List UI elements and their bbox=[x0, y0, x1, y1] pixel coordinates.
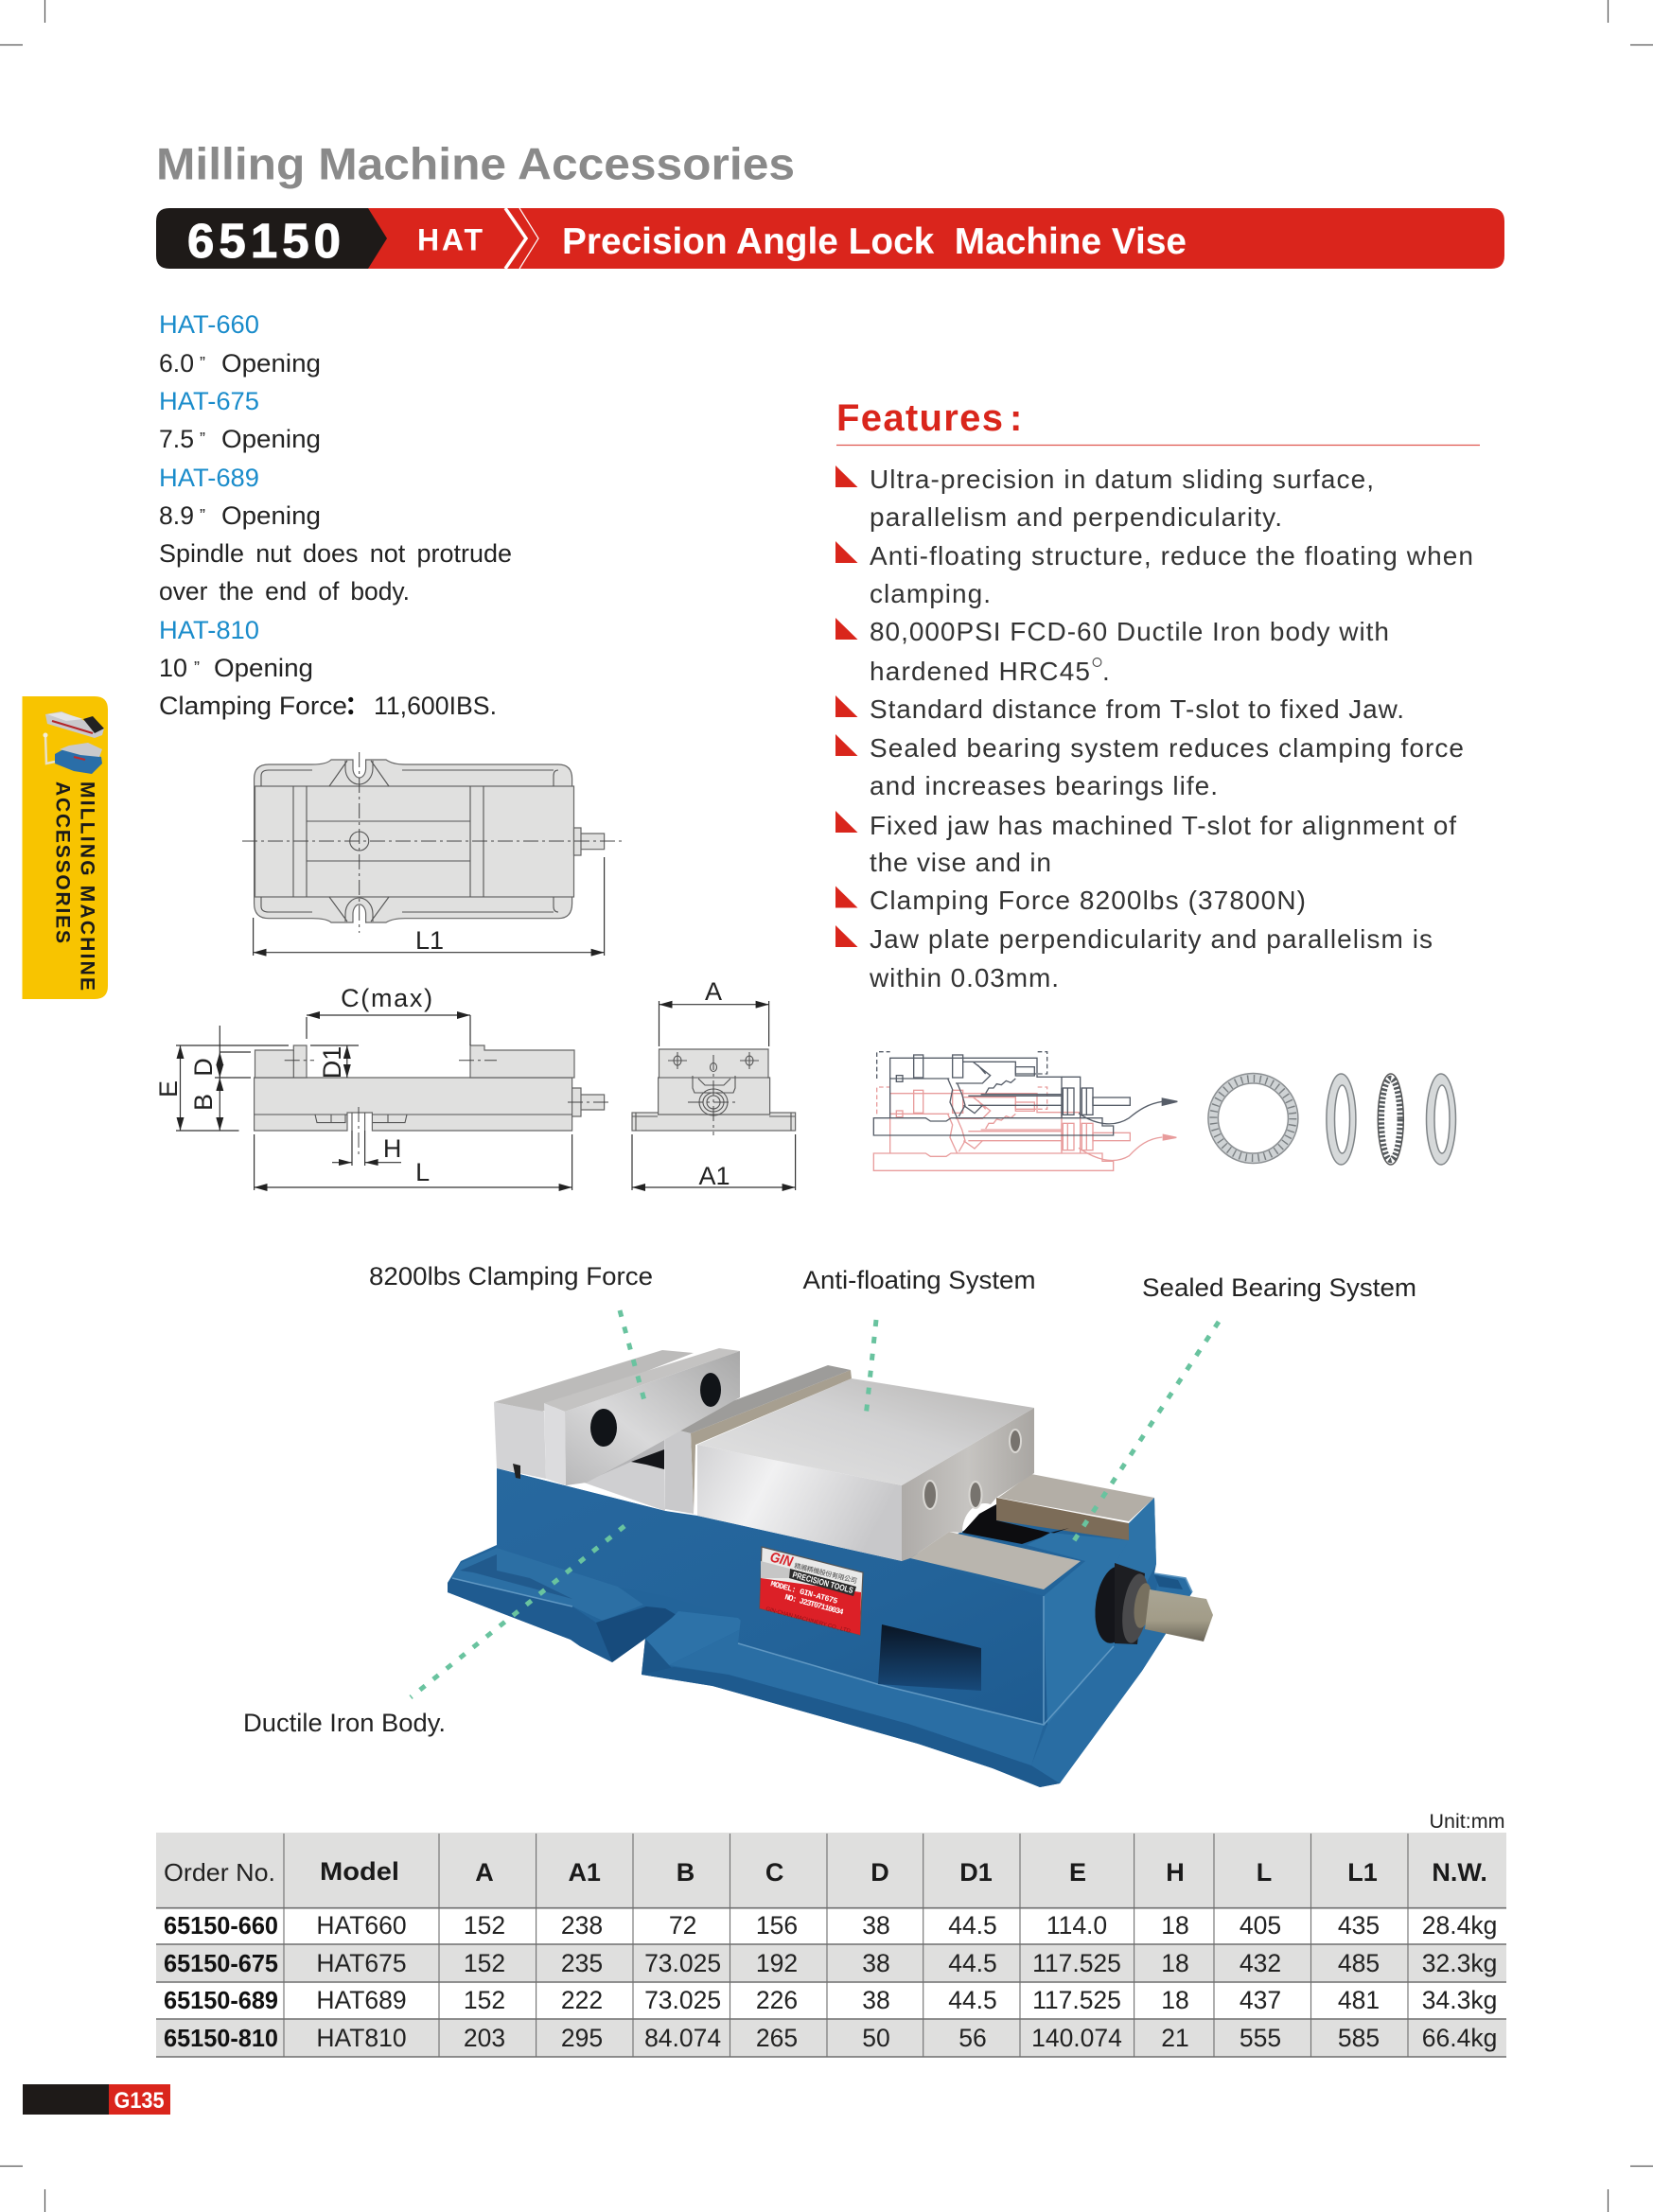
top view spindle bbox=[573, 828, 605, 855]
table row 65150-810: 65150-810 bbox=[164, 2024, 278, 2052]
opening 8.9: Opening bbox=[221, 501, 321, 530]
nameplate precision tools: PRECISION TOOLS bbox=[791, 1570, 854, 1595]
table row 65150-689: 38 bbox=[862, 1986, 890, 2014]
table row 65150-675: HAT675 bbox=[316, 1949, 407, 1977]
table row 65150-689: HAT689 bbox=[316, 1986, 407, 2014]
nameplate chinese name: 精展精機股份有限公司 bbox=[794, 1561, 858, 1585]
page tag black block bbox=[23, 2084, 109, 2115]
vise base silhouette bbox=[448, 1468, 1192, 1787]
callout: sealed bearing bbox=[1073, 1273, 1416, 1542]
callout: anti-floating bbox=[802, 1266, 1035, 1417]
table row 65150-810: 84.074 bbox=[644, 2024, 721, 2052]
model list bbox=[159, 310, 512, 722]
clamping force: ： bbox=[344, 685, 370, 722]
bearing washer right bbox=[1427, 1074, 1455, 1165]
opening 8.9 bbox=[159, 501, 321, 530]
vise right flange top bbox=[1031, 1575, 1192, 1783]
end view base bbox=[632, 1113, 796, 1131]
opening 6.0: 6.0 bbox=[159, 349, 194, 377]
vise jaw bolts bbox=[590, 1373, 721, 1447]
nameplate serial: NO: J23T07110034 bbox=[783, 1592, 845, 1617]
icon: steel vise bbox=[45, 711, 104, 738]
end view drawing bbox=[632, 977, 796, 1190]
table row 65150-689: 44.5 bbox=[948, 1986, 997, 2014]
banner black code block bbox=[156, 208, 387, 269]
vise moving plate top bbox=[664, 1365, 851, 1433]
table row 65150-675: 38 bbox=[862, 1949, 890, 1977]
opening 10: Opening bbox=[214, 654, 313, 682]
table row 65150-660 bbox=[164, 1911, 1497, 1940]
table header: C bbox=[765, 1858, 783, 1887]
side view details bbox=[255, 1050, 572, 1131]
table row 65150-810: 295 bbox=[561, 2024, 603, 2052]
callout: clamping force bbox=[369, 1262, 653, 1404]
dimension label C(max): C(max) bbox=[341, 984, 432, 1012]
dimension label E: E bbox=[154, 1080, 183, 1097]
table row 65150-689: 222 bbox=[561, 1986, 603, 2014]
table row 65150-675: 65150-675 bbox=[164, 1949, 278, 1977]
gray raised position bbox=[873, 1052, 1177, 1135]
vise floor bbox=[584, 1462, 665, 1511]
table row 65150-675 bbox=[164, 1949, 1497, 1977]
table row 65150-810: HAT810 bbox=[316, 2024, 407, 2052]
callout: ductile iron bbox=[243, 1526, 624, 1737]
table row 65150-675: 44.5 bbox=[948, 1949, 997, 1977]
table row 65150-660: 28.4kg bbox=[1422, 1911, 1497, 1940]
table row 65150-810: 555 bbox=[1240, 2024, 1281, 2052]
model HAT-689: HAT-689 bbox=[159, 464, 259, 492]
end view details bbox=[632, 1052, 795, 1131]
mechanism cross-section diagram bbox=[873, 1052, 1177, 1170]
dimension lines bbox=[176, 1015, 572, 1190]
model HAT-810: HAT-810 bbox=[159, 616, 259, 644]
table row 65150-689: 226 bbox=[756, 1986, 798, 2014]
table header: B bbox=[677, 1858, 695, 1887]
page tag red block bbox=[109, 2084, 170, 2115]
vise moving plate front bbox=[664, 1427, 694, 1514]
sidebar yellow background bbox=[23, 696, 108, 999]
table row 65150-689: 73.025 bbox=[644, 1986, 721, 2014]
table row 65150-810: 50 bbox=[862, 2024, 890, 2052]
red lowered position bbox=[873, 1087, 1176, 1170]
table row 65150-675: 18 bbox=[1161, 1949, 1189, 1977]
dimension A1 bbox=[632, 1134, 796, 1190]
nameplate grey band bbox=[761, 1561, 790, 1578]
nameplate red panel bbox=[760, 1578, 861, 1635]
table row 65150-810 bbox=[164, 2024, 1497, 2052]
vise left flange recess bbox=[460, 1554, 572, 1599]
dimension L1: L1 bbox=[415, 926, 444, 955]
table backgrounds bbox=[156, 1833, 1506, 2057]
dimension A bbox=[659, 977, 769, 1046]
table header: H bbox=[1166, 1858, 1185, 1887]
table row 65150-810: 585 bbox=[1338, 2024, 1380, 2052]
table row 65150-689: 481 bbox=[1338, 1986, 1380, 2014]
table row 65150-810: 56 bbox=[958, 2024, 987, 2052]
opening 10 bbox=[159, 654, 313, 682]
vise spindle hex bbox=[1145, 1589, 1213, 1641]
nameplate brand: GIN bbox=[768, 1549, 795, 1571]
table header: A bbox=[475, 1858, 494, 1887]
page tag bbox=[23, 2084, 170, 2115]
vise fixed jaw front bbox=[494, 1402, 546, 1479]
feature list text: hardened HRC45 bbox=[870, 657, 1090, 686]
features panel bbox=[835, 397, 1480, 992]
end view body bbox=[659, 1049, 770, 1115]
feature list text: Ultra-precision in datum sliding surface, bbox=[870, 465, 1374, 494]
dimension label B: B bbox=[189, 1094, 218, 1111]
vise fixed plate face bbox=[565, 1351, 740, 1485]
banner chevrons bbox=[505, 208, 538, 269]
table row 65150-660: 72 bbox=[669, 1911, 696, 1940]
feature list text: Fixed jaw has machined T-slot for alignment of bbox=[870, 811, 1456, 840]
vise body front face bbox=[497, 1468, 1047, 1725]
icon: blue vise bbox=[44, 732, 102, 774]
top view drawing bbox=[242, 752, 625, 956]
vise body right face bbox=[1044, 1498, 1156, 1725]
vise plate strip bbox=[691, 1370, 852, 1514]
feature list text: Standard distance from T-slot to fixed Jaw. bbox=[870, 694, 1404, 724]
table row 65150-689: 34.3kg bbox=[1422, 1986, 1497, 2014]
feature list text: within 0.03mm. bbox=[869, 963, 1059, 992]
opening 6.0 bbox=[159, 349, 321, 377]
table row 65150-660: 435 bbox=[1338, 1911, 1380, 1940]
nameplate model: MODEL: GIN-AT675 bbox=[769, 1579, 838, 1606]
dimension label L: L bbox=[415, 1158, 430, 1186]
vise spindle collar bbox=[1090, 1563, 1154, 1645]
vise dark opening bbox=[962, 1504, 1069, 1544]
vise front pad bbox=[645, 1611, 743, 1665]
table row 65150-660: 152 bbox=[464, 1911, 505, 1940]
bearing needle cage bbox=[1208, 1073, 1298, 1164]
vise casting highlights bbox=[452, 1573, 1192, 1725]
table row 65150-660: 65150-660 bbox=[164, 1911, 278, 1940]
opening 6.0: ” bbox=[200, 354, 205, 373]
features heading: Features bbox=[836, 397, 1003, 439]
table row 65150-810: 66.4kg bbox=[1422, 2024, 1497, 2052]
feature list text: Jaw plate perpendicularity and parallelism is bbox=[870, 924, 1433, 954]
table header: Model bbox=[320, 1857, 399, 1886]
table row 65150-675: 32.3kg bbox=[1422, 1949, 1497, 1977]
model HAT-675: HAT-675 bbox=[159, 387, 259, 415]
top view details bbox=[261, 761, 558, 922]
feature list text bbox=[869, 465, 1473, 992]
opening 8.9: 8.9 bbox=[159, 501, 194, 530]
opening 8.9: ” bbox=[200, 506, 205, 525]
nameplate dark band bbox=[789, 1569, 856, 1596]
sidebar label line 1: MILLING MACHINE bbox=[76, 781, 98, 991]
dimension A1: A1 bbox=[698, 1162, 730, 1190]
table row 65150-689: 65150-689 bbox=[164, 1986, 278, 2014]
table row 65150-689: 117.525 bbox=[1032, 1986, 1121, 2014]
opening 6.0: Opening bbox=[221, 349, 321, 377]
feature list text: clamping. bbox=[870, 579, 991, 608]
vise dark gap bbox=[631, 1449, 664, 1469]
feature bullets bbox=[835, 465, 857, 947]
vise left flange edge bbox=[448, 1578, 612, 1662]
feature list text: the vise and in bbox=[870, 848, 1051, 877]
table row 65150-810: 21 bbox=[1161, 2024, 1189, 2052]
bearing washer left bbox=[1327, 1074, 1356, 1165]
callout: ductile iron: Ductile Iron Body. bbox=[243, 1709, 446, 1737]
vise flange slot bbox=[1154, 1575, 1183, 1589]
table row 65150-810: 203 bbox=[464, 2024, 505, 2052]
feature list text: and increases bearings life. bbox=[870, 771, 1218, 800]
vise fixed jaw top bbox=[494, 1350, 694, 1412]
nameplate bbox=[760, 1547, 863, 1635]
page number: G135 bbox=[114, 2088, 165, 2114]
opening 10: 10 bbox=[159, 654, 187, 682]
top view body bbox=[255, 760, 572, 922]
table row 65150-675: 485 bbox=[1338, 1949, 1380, 1977]
feature list text: Clamping Force 8200lbs (37800N) bbox=[870, 886, 1306, 915]
dimension label D1: D1 bbox=[318, 1046, 346, 1079]
vise pad front face bbox=[642, 1639, 674, 1675]
vise rail bbox=[996, 1498, 1129, 1540]
vise left flange top bbox=[451, 1548, 643, 1621]
side view drawing bbox=[154, 984, 612, 1190]
table header: Order No. bbox=[164, 1858, 275, 1887]
feature list text: . bbox=[1102, 657, 1110, 686]
table row 65150-689: 152 bbox=[464, 1986, 505, 2014]
feature list text: 80,000PSI FCD-60 Ductile Iron body with bbox=[870, 617, 1389, 646]
table header bbox=[164, 1857, 1487, 1887]
spindle note line 1: Spindle nut does not protrude bbox=[159, 539, 512, 568]
table row 65150-675: 192 bbox=[756, 1949, 798, 1977]
vise photo bbox=[448, 1348, 1213, 1787]
vise T-slot notch bbox=[513, 1464, 520, 1479]
vise front rim bbox=[669, 1629, 1044, 1765]
vise rear steel ledge bbox=[998, 1474, 1154, 1521]
title: Milling Machine Accessories bbox=[156, 138, 795, 189]
bearing needle ring bbox=[1378, 1074, 1403, 1165]
callout: clamping force: 8200lbs Clamping Force bbox=[369, 1262, 653, 1290]
table row 65150-660: 238 bbox=[561, 1911, 603, 1940]
banner red bar bbox=[170, 208, 1504, 269]
callout: sealed bearing: Sealed Bearing System bbox=[1142, 1273, 1416, 1302]
table header: A1 bbox=[568, 1858, 601, 1887]
table header: L1 bbox=[1347, 1858, 1378, 1887]
table row 65150-660: HAT660 bbox=[316, 1911, 407, 1940]
model HAT-660: HAT-660 bbox=[159, 310, 259, 339]
vise nut area bbox=[1027, 1533, 1129, 1561]
vise floor backing bbox=[587, 1440, 664, 1483]
vise moving jaw front face bbox=[697, 1445, 902, 1561]
table row 65150-810: 140.074 bbox=[1031, 2024, 1122, 2052]
table row 65150-660: 44.5 bbox=[948, 1911, 997, 1940]
callout: anti-floating: Anti-floating System bbox=[802, 1266, 1035, 1294]
table row 65150-689: 18 bbox=[1161, 1986, 1189, 2014]
side view base bbox=[255, 1078, 572, 1131]
features heading: : bbox=[1010, 397, 1022, 439]
vise moving jaw top bbox=[697, 1378, 1034, 1485]
table row 65150-689 bbox=[164, 1986, 1497, 2014]
top view slide bbox=[255, 786, 573, 897]
dimension label H: H bbox=[383, 1134, 401, 1163]
spindle note line 2: over the end of body. bbox=[159, 577, 410, 606]
feature list text: parallelism and perpendicularity. bbox=[870, 502, 1282, 532]
end view centre lines bbox=[688, 1055, 739, 1135]
features rule bbox=[836, 445, 1480, 447]
spec table bbox=[156, 1833, 1506, 2057]
opening 7.5 bbox=[159, 425, 321, 453]
vise moving jaw right face bbox=[902, 1408, 1034, 1561]
opening 7.5: 7.5 bbox=[159, 425, 194, 453]
opening 10: ” bbox=[194, 658, 200, 677]
vise fixed plate top bbox=[544, 1348, 740, 1412]
table row 65150-675: 152 bbox=[464, 1949, 505, 1977]
banner product name: Precision Angle Lock Machine Vise bbox=[562, 221, 1187, 262]
side view moving jaw bbox=[470, 1045, 574, 1078]
clamping force: 11,600IBS. bbox=[374, 692, 497, 720]
side view centre lines bbox=[285, 1061, 612, 1154]
table grid bbox=[156, 1834, 1506, 2057]
table row 65150-675: 73.025 bbox=[644, 1949, 721, 1977]
table row 65150-675: 235 bbox=[561, 1949, 603, 1977]
banner code number: 65150 bbox=[187, 214, 341, 268]
opening 7.5: Opening bbox=[221, 425, 321, 453]
nameplate plate bbox=[760, 1547, 863, 1635]
table row 65150-660: 405 bbox=[1240, 1911, 1281, 1940]
vise fixed plate end bbox=[544, 1403, 566, 1485]
unit label: Unit:mm bbox=[1429, 1810, 1504, 1833]
table header: D1 bbox=[959, 1858, 993, 1887]
opening 7.5: ” bbox=[200, 430, 205, 448]
nameplate maker: GIN-CHAN MACHINERY CO., LTD. bbox=[765, 1606, 853, 1635]
table row 65150-675: 432 bbox=[1240, 1949, 1281, 1977]
vise jaw holes bbox=[923, 1430, 1021, 1509]
table row 65150-689: 437 bbox=[1240, 1986, 1281, 2014]
vise slot interior bbox=[596, 1606, 677, 1662]
feature list text: Sealed bearing system reduces clamping force bbox=[870, 733, 1464, 763]
table header: L bbox=[1257, 1858, 1272, 1887]
table row 65150-810: 265 bbox=[756, 2024, 798, 2052]
sidebar tab bbox=[23, 696, 108, 999]
dimension L1 bbox=[254, 857, 605, 956]
bearing set bbox=[1208, 1073, 1455, 1165]
table row 65150-660: 38 bbox=[862, 1911, 890, 1940]
vise front steel ledge bbox=[910, 1532, 1081, 1589]
dimension A: A bbox=[705, 977, 722, 1006]
side view fixed jaw bbox=[255, 1045, 307, 1078]
table header: D bbox=[870, 1858, 889, 1887]
table row 65150-660: 156 bbox=[756, 1911, 798, 1940]
feature list text: Anti-floating structure, reduce the floating when bbox=[870, 541, 1473, 571]
dimension label D: D bbox=[189, 1058, 218, 1077]
table header: E bbox=[1069, 1858, 1086, 1887]
banner bbox=[156, 208, 1504, 269]
vise bottom edge bbox=[642, 1667, 1060, 1787]
table header: N.W. bbox=[1432, 1858, 1487, 1887]
clamping force bbox=[159, 685, 497, 722]
top view centre lines bbox=[242, 752, 625, 933]
table row 65150-660: 114.0 bbox=[1046, 1911, 1107, 1940]
clamping force: Clamping Force bbox=[159, 692, 347, 720]
table row 65150-675: 117.525 bbox=[1032, 1949, 1121, 1977]
banner series: HAT bbox=[417, 223, 483, 257]
table row 65150-660: 18 bbox=[1161, 1911, 1189, 1940]
sidebar label line 2: ACCESSORIES bbox=[51, 781, 74, 943]
side view spindle bbox=[572, 1088, 605, 1116]
vise window bbox=[878, 1624, 981, 1691]
